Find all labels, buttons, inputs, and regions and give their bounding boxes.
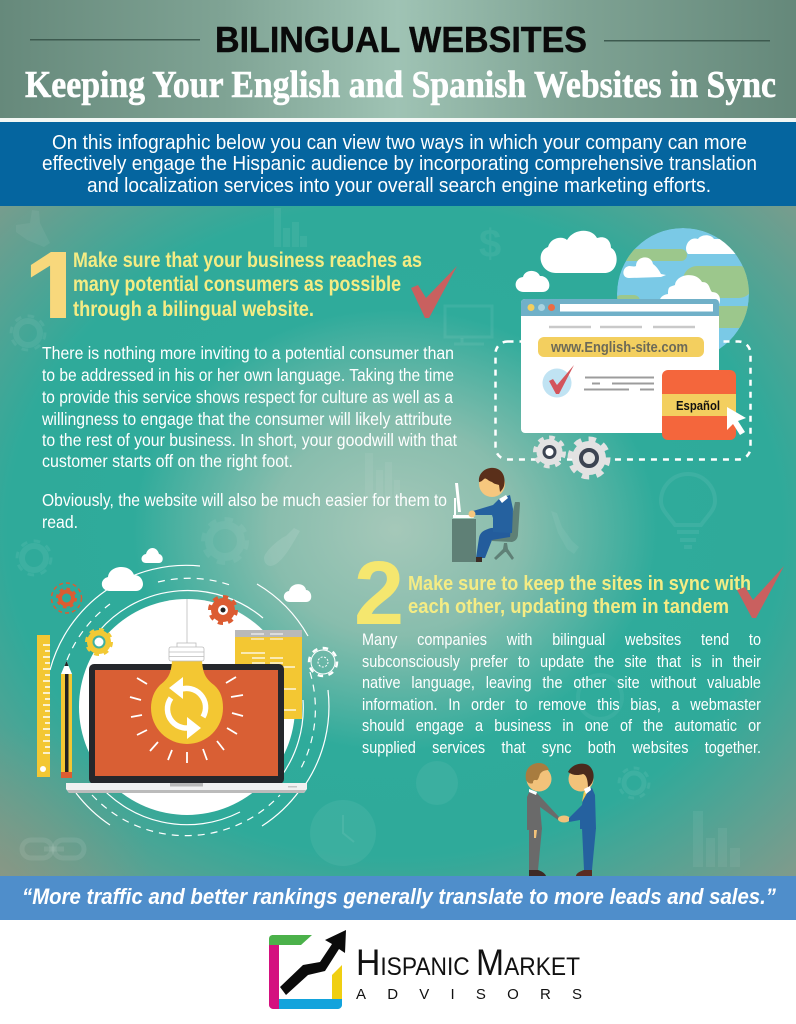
- cloud small: [516, 271, 549, 292]
- right man hair: [568, 764, 594, 788]
- hair: [479, 468, 505, 492]
- section 2 body text: [362, 630, 761, 756]
- cloud large: [541, 231, 617, 273]
- background icon: brush: [264, 528, 300, 566]
- hand: [468, 510, 476, 518]
- background icon: gear left: [11, 316, 45, 350]
- browser window: [521, 299, 719, 433]
- intro line 2: effectively engage the Hispanic audience by incorporating comprehensive translation: [42, 153, 757, 175]
- section 2 number: 2: [354, 544, 404, 644]
- section 1 body text: to be addressed in his or her own language. Taking the time: [42, 365, 454, 385]
- red gear: [210, 597, 236, 623]
- url bar: [538, 337, 704, 357]
- background icon: clock: [310, 800, 376, 866]
- legs: [476, 527, 511, 558]
- icon: check mark 1: [411, 266, 457, 318]
- section 1 body text: to the rest of your business. In short, your goodwill with that: [42, 430, 457, 450]
- cloud small top: [142, 548, 163, 563]
- section 2 heading: Make sure to keep the sites in sync with: [408, 573, 751, 595]
- chair: [492, 502, 520, 560]
- website illustration: [496, 228, 758, 477]
- intro line 3: and localization services into your overall search engine marketing efforts.: [87, 175, 711, 197]
- ruler: [37, 635, 50, 777]
- orbit rings: [50, 565, 329, 836]
- section 1 body text: to provide this service shows respect for culture as well as a: [42, 387, 453, 407]
- title: BILINGUAL WEBSITES: [215, 19, 587, 60]
- section 2 heading: each other, updating them in tandem: [408, 596, 729, 618]
- left man collar: [529, 789, 537, 795]
- section 2 body text: subconsciously prefer to update the site that is in their: [362, 652, 761, 670]
- sync arrows: [167, 688, 206, 728]
- gear small: [535, 438, 564, 466]
- head: [479, 471, 505, 497]
- handshake figures: [526, 763, 596, 876]
- section 2 heading: [408, 573, 751, 618]
- left man head: [526, 766, 552, 792]
- light rays: [130, 677, 243, 763]
- logo frame yellow: [332, 965, 342, 999]
- logo arrow: [280, 930, 346, 995]
- left man hand: [534, 830, 537, 838]
- spanish flag card: [662, 370, 736, 440]
- background icon: faint ring: [578, 675, 622, 719]
- quote band: [0, 876, 796, 920]
- left man hair: [526, 763, 549, 784]
- section 1 heading: through a bilingual website.: [73, 298, 314, 321]
- background icon: globe: [416, 761, 458, 805]
- section 1 body text: [41, 343, 457, 532]
- background icon: wheel gear: [619, 768, 649, 798]
- right man collar: [584, 786, 591, 794]
- icon: check mark 2: [737, 566, 784, 618]
- section 1 heading: Make sure that your business reaches as: [73, 249, 422, 272]
- background icon: dollar: $: [479, 222, 501, 266]
- dashed selection frame: [496, 342, 750, 460]
- globe: [617, 228, 749, 349]
- background icon: gear 2: [17, 541, 51, 575]
- light bulb: [151, 599, 223, 744]
- faint background icons: [11, 208, 740, 867]
- cursor: [727, 407, 746, 435]
- section 2 body text: Many companies with bilingual websites tend to: [362, 630, 761, 649]
- gear large: [570, 439, 608, 477]
- page background: [0, 206, 796, 1024]
- section 2 body text: native language, leaving the other site without valuable: [362, 673, 761, 692]
- header band: [0, 0, 796, 122]
- person at desk: [452, 468, 520, 562]
- section 2 body text: supplied services that sync both websites together.: [362, 738, 761, 756]
- handshake: [558, 816, 570, 822]
- logo frame magenta: [269, 945, 279, 1009]
- cloud top: [102, 567, 143, 591]
- right man legs: [582, 828, 596, 870]
- yellow document: [235, 630, 302, 719]
- monitor: [453, 483, 474, 518]
- laptop illustration: [37, 548, 337, 836]
- shoe: [476, 557, 482, 562]
- background icon: lightbulb: [661, 474, 715, 547]
- check icon: [542, 365, 574, 398]
- url text: www.English-site.com: [550, 339, 688, 356]
- left man legs: [529, 828, 542, 870]
- cloud right: [284, 584, 311, 602]
- section 1 heading: many potential consumers as possible: [73, 273, 401, 296]
- pencil: [61, 661, 72, 778]
- section 1 body text: Obviously, the website will also be much easier for them to: [42, 490, 447, 510]
- background icon: bars bottom: [693, 811, 740, 867]
- left man jacket: [527, 790, 559, 830]
- right man tie: [582, 791, 587, 802]
- torso and arm: [473, 495, 513, 533]
- background icon: thumb: [16, 210, 50, 247]
- collar: [499, 495, 508, 503]
- header rule right: [604, 40, 770, 42]
- logo frame blue: [279, 999, 342, 1009]
- background icon: monitor: [445, 306, 492, 344]
- background icon: bars middle: [365, 453, 400, 498]
- section 1 body text: read.: [42, 512, 78, 532]
- left man shoes: [529, 870, 546, 876]
- spanish flag card: Español: [676, 398, 720, 413]
- white circle backdrop: [79, 599, 295, 815]
- intro band: [0, 122, 796, 206]
- section 1 body text: customer starts off on the right foot.: [42, 451, 293, 471]
- section 1 body text: There is nothing more inviting to a potential consumer than: [42, 343, 454, 363]
- logo frame green: [269, 935, 312, 945]
- dashed red gear: [52, 583, 82, 613]
- logo wordmark: HISPANIC MARKET: [356, 942, 580, 983]
- background icon: bars: [274, 208, 307, 247]
- right man shoes: [576, 870, 592, 876]
- logo tagline: ADVISORS: [356, 986, 582, 1003]
- yellow gear: [87, 630, 111, 654]
- laptop: [66, 664, 307, 793]
- right man jacket: [569, 788, 596, 829]
- background icon: wrench: [551, 511, 579, 554]
- logo: [269, 930, 582, 1009]
- right man head: [568, 766, 594, 792]
- white outline gear: [309, 648, 337, 676]
- background icon: gear 3: [203, 519, 247, 563]
- intro line 1: On this infographic below you can view two ways in which your company can more: [52, 132, 747, 154]
- background icon: chain: [22, 840, 84, 858]
- section 1 heading: [73, 249, 422, 321]
- desk: [452, 519, 476, 562]
- section 1 body text: willingness to engage that the consumer will likely attribute: [41, 409, 452, 429]
- header rule left: [30, 39, 200, 40]
- section 2 body text: information. In order to remove this bias, a webmaster: [362, 694, 761, 714]
- section 1 number: 1: [23, 227, 88, 357]
- section 2 body text: should engage a business in one of the automatic or: [362, 716, 761, 735]
